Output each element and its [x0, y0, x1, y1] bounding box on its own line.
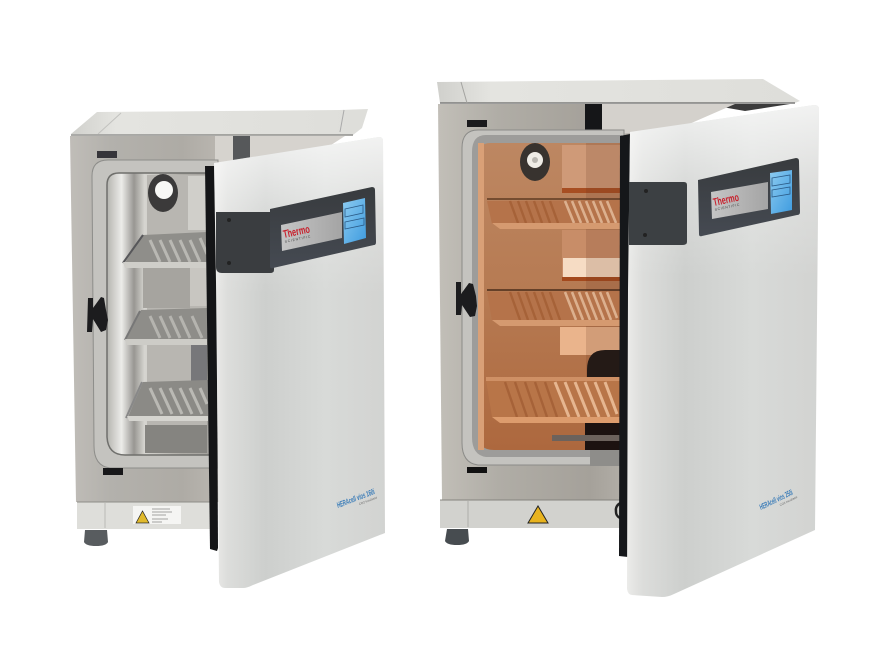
right reflection — [600, 104, 735, 134]
right lid — [437, 79, 800, 111]
right door — [627, 105, 819, 597]
left base — [77, 502, 212, 529]
right touch screen — [770, 170, 792, 214]
left model text: CO2 Incubator — [358, 495, 378, 506]
left label plate — [281, 212, 342, 251]
right middle shelf — [487, 290, 622, 326]
left control panel — [270, 187, 376, 268]
right brand: SCIENTIFIC — [714, 203, 740, 212]
right model text: HERAcell vios 250i — [758, 488, 795, 512]
left brand: SCIENTIFIC — [284, 234, 311, 244]
left door — [214, 137, 385, 588]
left incubator — [70, 109, 385, 588]
right brand — [712, 192, 741, 212]
left brand: Thermo — [282, 224, 311, 241]
right warning triangle — [528, 506, 548, 523]
right brand: Thermo — [712, 192, 740, 209]
left warning label — [133, 506, 181, 524]
right port — [520, 143, 550, 181]
right hinge seal — [619, 134, 630, 557]
right incubator — [437, 79, 819, 597]
right upper plate — [467, 120, 487, 127]
right handle block — [629, 182, 687, 245]
right label plate — [711, 182, 768, 219]
right amber chamber — [478, 143, 622, 450]
left upper plate — [97, 151, 117, 158]
left upper shelf — [123, 232, 207, 268]
right lower shelf — [486, 377, 622, 423]
left cabinet body — [70, 136, 230, 502]
left lower plate — [103, 468, 123, 475]
left handle block — [216, 212, 274, 273]
left brand — [282, 224, 312, 244]
right door gasket frame — [462, 130, 624, 465]
left foot — [84, 530, 108, 546]
right cabinet body — [438, 104, 640, 500]
left back panels — [143, 176, 208, 453]
right glass lower reflection — [590, 450, 622, 466]
right latch — [456, 282, 477, 317]
left rear wall — [147, 175, 207, 451]
left rear post — [233, 136, 250, 162]
left model text — [335, 487, 378, 514]
right rear post — [585, 104, 602, 136]
right model text — [758, 487, 798, 515]
left port — [148, 174, 178, 212]
left lid — [71, 109, 368, 135]
left latch — [87, 297, 108, 332]
right foot — [445, 529, 469, 545]
left reflection — [215, 136, 345, 170]
left model text: HERAcell vios 160i — [335, 487, 376, 510]
left door gasket frame — [92, 160, 218, 468]
left hinge seal — [205, 166, 218, 551]
left touch screen — [343, 198, 366, 244]
right base — [440, 500, 622, 528]
right lower plate — [467, 467, 487, 473]
right upper shelf — [487, 199, 622, 229]
right control panel — [698, 158, 800, 236]
left chamber — [107, 173, 211, 455]
right model text: CO2 Incubator — [779, 495, 798, 507]
left lower shelf — [126, 380, 208, 421]
left middle shelf — [125, 308, 207, 345]
